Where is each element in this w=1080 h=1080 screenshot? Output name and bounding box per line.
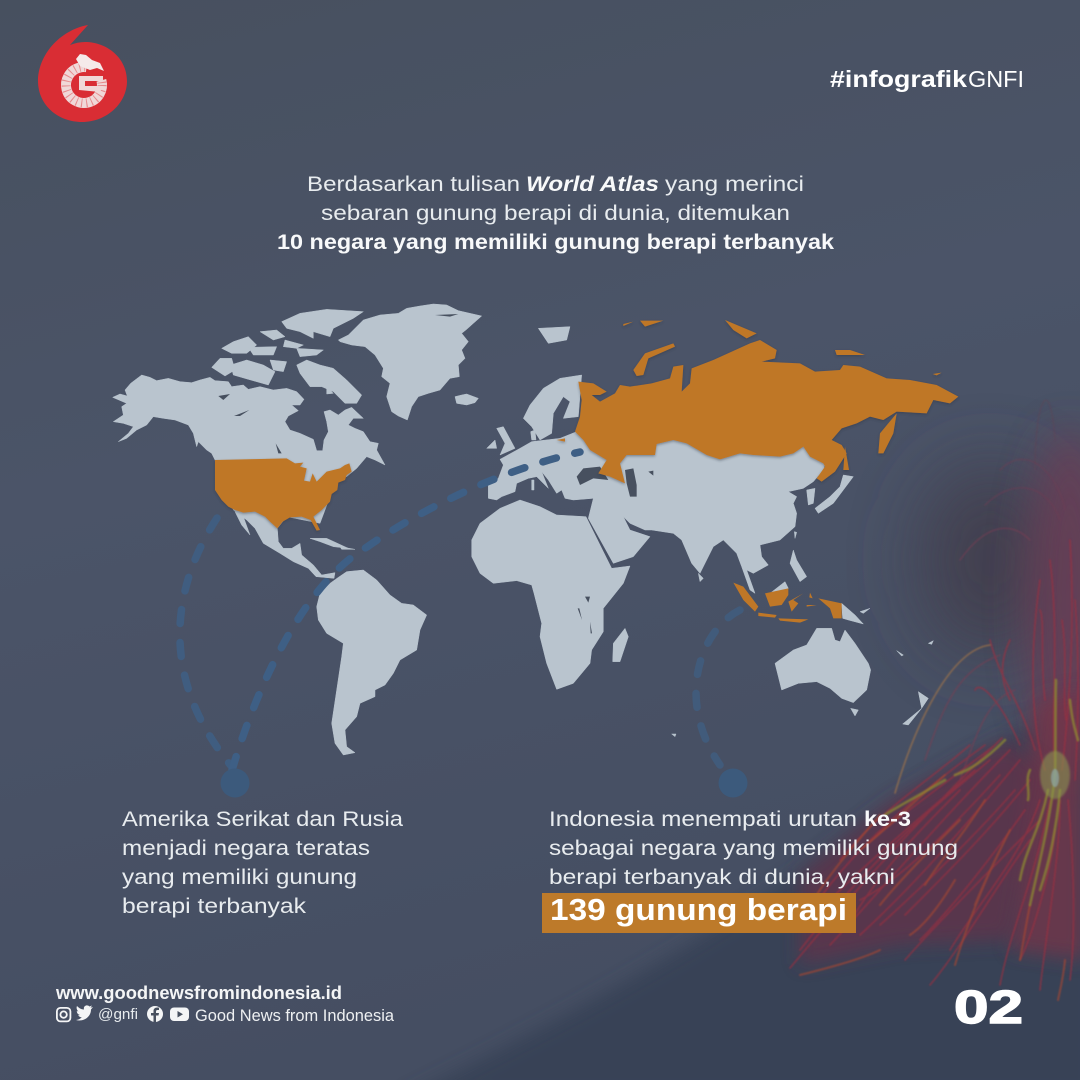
route dashes	[180, 452, 740, 770]
russia	[557, 320, 958, 483]
land: north america	[113, 375, 385, 578]
caption: right: berapi terbanyak di dunia, yakni	[549, 865, 895, 889]
caption: left: menjadi negara teratas	[122, 836, 370, 860]
handle: @gnfi	[98, 1007, 138, 1023]
hashtag: GNFI	[968, 66, 1024, 92]
land: scandinavia	[523, 375, 582, 440]
seas and lakes	[577, 467, 653, 633]
highlight: 139 gunung berapi: 139 gunung berapi	[550, 892, 847, 927]
route marker left	[220, 768, 250, 798]
map: americas	[113, 304, 482, 755]
land: south america	[317, 570, 427, 755]
land: madagascar sri lanka	[613, 573, 703, 662]
land: korea japan taiwan philippines	[790, 475, 853, 582]
caption: right	[542, 807, 958, 933]
intro text	[277, 172, 834, 254]
volcano photo background	[400, 400, 1080, 1080]
hashtag: #infografik	[830, 66, 967, 92]
map: eastern hemisphere	[472, 320, 958, 737]
intro text: World Atlas	[526, 172, 659, 196]
caption: right: ke-3	[864, 807, 911, 831]
icon: facebook	[147, 1006, 163, 1022]
land: greenland	[338, 304, 482, 420]
intro text: sebaran gunung berapi di dunia, ditemukan	[321, 201, 790, 225]
caption: left	[122, 807, 403, 918]
lakes canada	[218, 314, 458, 453]
route marker right	[718, 768, 748, 798]
caption: left: berapi terbanyak	[122, 894, 306, 918]
logo: GNFI	[38, 25, 127, 122]
intro text: yang merinci	[665, 172, 804, 196]
land: africa	[472, 500, 630, 689]
land: arctic islands	[212, 309, 478, 405]
land: oceania	[672, 582, 933, 737]
caption: right: sebagai negara yang memiliki gunung	[549, 836, 958, 860]
intro text: 10 negara yang memiliki gunung berapi terbanyak	[277, 230, 834, 254]
channel name: Good News from Indonesia	[195, 1006, 395, 1025]
caption: right: Indonesia menempati urutan	[549, 807, 857, 831]
icon: instagram	[57, 1008, 70, 1021]
page number: 02	[954, 981, 1023, 1033]
usa	[215, 458, 352, 531]
intro text: Berdasarkan tulisan	[307, 172, 520, 196]
icon: youtube	[170, 1008, 189, 1021]
land: svalbard uk	[487, 327, 570, 490]
caption: left: Amerika Serikat dan Rusia	[122, 807, 403, 831]
footer: website: www.goodnewsfromindonesia.id	[55, 983, 342, 1003]
hashtag	[830, 66, 1024, 92]
land: eurasia	[488, 432, 830, 593]
caption: left: yang memiliki gunung	[122, 865, 357, 889]
land: baja and caribbean	[235, 512, 355, 549]
footer: social	[57, 1005, 395, 1025]
indonesia	[733, 583, 842, 623]
icon: twitter	[76, 1005, 93, 1021]
world map	[113, 304, 958, 798]
